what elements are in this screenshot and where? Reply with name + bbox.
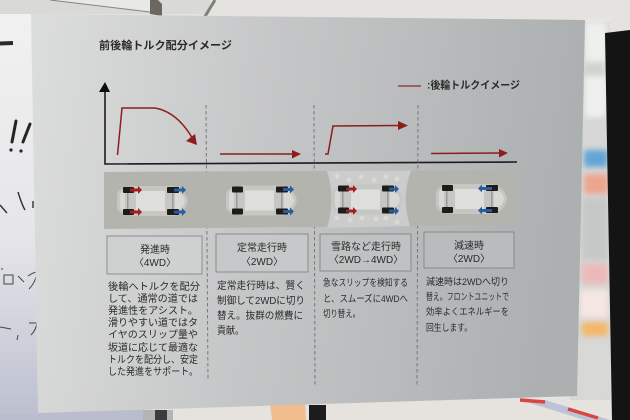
car diagram band (104, 170, 517, 229)
label box: snow (320, 234, 411, 271)
description: deceleration: 減速時は2WDへ切り (426, 276, 509, 288)
torque curve: start (118, 108, 197, 155)
description: start: した発進をサポート。 (108, 365, 198, 378)
description: cruising: 制御して2WDに切り (217, 294, 305, 307)
icon: car deceleration (436, 184, 507, 214)
label box: cruising: 定常走行時 (237, 241, 287, 254)
description: start: 坂道に応じて最適な (108, 341, 198, 354)
icon: car 4WD start (117, 186, 188, 216)
description: snow: 急なスリップを検知する (323, 277, 408, 289)
description: snow: 切り替え。 (323, 308, 360, 320)
right black panel (605, 30, 630, 420)
description: deceleration: 回生します。 (426, 322, 472, 334)
description: deceleration (426, 276, 509, 334)
description: deceleration: 替え。フロントユニットで (426, 291, 509, 303)
title: 前後輪トルク配分イメージ (99, 38, 232, 52)
label box: deceleration (424, 232, 514, 268)
description: cruising: 定常走行時は、賢く (217, 279, 305, 292)
description: start (108, 280, 200, 378)
description: start: イヤのスリップ量や (108, 329, 198, 341)
label box: deceleration: 減速時 (454, 239, 484, 252)
label box: snow: 〈2WD→4WD〉 (329, 254, 403, 266)
torque arrow: cruising (220, 150, 301, 158)
description: start: して、通常の道では (108, 292, 198, 305)
label box: deceleration: 〈2WD〉 (448, 253, 490, 265)
torque arrow: deceleration (431, 149, 508, 158)
description: start: 後輪へトルクを配分 (108, 280, 200, 293)
chart axes (99, 82, 517, 164)
legend: :後輪トルクイメージ (427, 78, 520, 92)
whiteboard with handwriting (0, 14, 40, 414)
icon: car snow (332, 184, 403, 215)
description: cruising: 貢献。 (217, 324, 244, 337)
description: start: トルクを配分し、安定 (108, 354, 198, 366)
dividers (206, 105, 418, 385)
description: snow: と、スムーズに4WDへ (323, 293, 408, 305)
torque arrow: snow (325, 121, 408, 154)
description: cruising: 替え。抜群の燃費に (217, 309, 303, 322)
label box: start: 発進時 (140, 243, 170, 256)
label box: cruising (216, 234, 308, 272)
description: deceleration: 効率よくエネルギーを (426, 307, 509, 318)
description: start: 滑りやすい道ではタ (108, 316, 198, 329)
description: snow (323, 277, 408, 320)
label box: start (107, 236, 202, 274)
icon: car 2WD cruising (226, 186, 297, 216)
label box: snow: 雪路など走行時 (331, 240, 401, 253)
label box: cruising: 〈2WD〉 (241, 256, 283, 268)
label box: start: 〈4WD〉 (134, 257, 176, 269)
legend (398, 78, 520, 92)
description: start: 発進性をアシスト。 (108, 304, 198, 317)
description: cruising (217, 279, 305, 337)
